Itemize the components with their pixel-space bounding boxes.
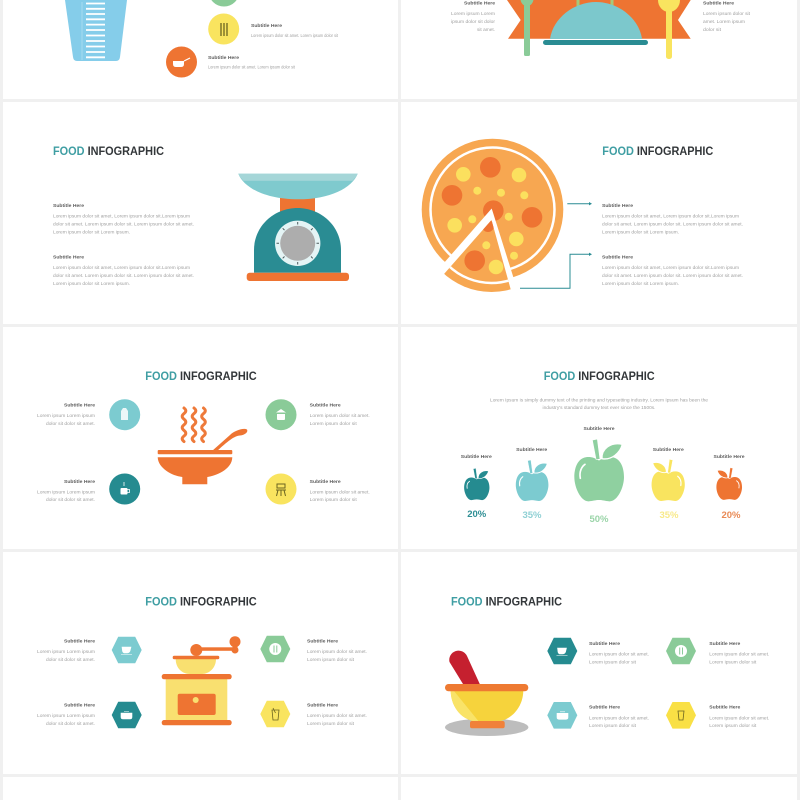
text block: cutlery subtitle: Subtitle Here xyxy=(251,23,282,28)
text block: pot: Lorem ipsum dolor sit xyxy=(310,421,358,426)
text block: plate: Lorem ipsum dolor sit amet. xyxy=(307,649,367,654)
panel: soup bowl slide xyxy=(3,327,398,549)
text block: grill: Lorem ipsum dolor sit xyxy=(310,497,358,502)
text block: pizza second: dolor sit amet. Lorem ipsum dolor sit. Lorem ipsum dolor sit amet. xyxy=(602,273,743,278)
icon: coffee grinder xyxy=(162,636,240,725)
text block: intro xyxy=(490,398,709,410)
text block: plate: Lorem ipsum dolor sit amet. xyxy=(709,651,769,656)
text block: pizza first: Lorem ipsum dolor sit amet, Lorem ipsum dolor sit.Lorem ipsum xyxy=(602,214,739,219)
chart item: 50% green apple: Subtitle Here xyxy=(584,426,615,431)
text block: plate: Subtitle Here xyxy=(709,641,741,646)
text block: cup: dolor sit dolor sit amet. xyxy=(46,657,95,662)
icon: yellow spoon xyxy=(658,0,680,59)
text block: pot xyxy=(589,705,649,728)
text block: intro: industry's standard dummy text ever since the 1500s. xyxy=(542,405,656,410)
text block: plate: Subtitle Here xyxy=(307,639,338,644)
text block: cup: Lorem ipsum dolor sit amet. xyxy=(589,651,649,656)
text block: pot: Lorem ipsum dolor sit amet. xyxy=(589,715,649,720)
icon: kitchen scale xyxy=(238,174,358,281)
title: FOOD INFOGRAPHIC xyxy=(53,144,164,158)
text block: scale first: Lorem ipsum dolor sit Lorem ipsum. xyxy=(53,230,130,235)
text block: pizza second: Lorem ipsum dolor sit amet, Lorem ipsum dolor sit.Lorem ipsum xyxy=(602,265,739,270)
arrow: to second text xyxy=(520,253,592,288)
icon: yellow cutlery circle xyxy=(208,14,239,44)
panel: pizza slide xyxy=(401,102,797,324)
panel: kitchen scale slide xyxy=(3,102,398,324)
text block: bottle: dolor sit dolor sit amet. xyxy=(46,421,95,426)
chart item: 35% light teal apple: Subtitle Here xyxy=(516,447,548,452)
text block: coffee xyxy=(37,479,95,502)
text block: scale second: dolor sit amet. Lorem ipsum dolor sit. Lorem ipsum dolor sit amet. xyxy=(53,273,194,278)
text block: plate: Lorem ipsum dolor sit xyxy=(709,659,757,664)
text block: pizza first: Lorem ipsum dolor sit Lorem ipsum. xyxy=(602,230,679,235)
text block: cloche left: Lorem ipsum Lorem xyxy=(451,11,495,16)
text block: cloche right xyxy=(703,0,751,32)
panel: mortar slide xyxy=(401,552,797,774)
title: FOOD INFOGRAPHIC xyxy=(602,144,713,158)
icon: green circle xyxy=(208,0,240,6)
text block: pot: Subtitle Here xyxy=(310,403,341,408)
text block: drink: Lorem ipsum dolor sit xyxy=(307,721,355,726)
icon: drink hexagon xyxy=(260,701,290,727)
text block: scale first xyxy=(53,203,194,235)
text block: grill xyxy=(310,479,370,502)
text block: pot: Subtitle Here xyxy=(64,703,95,708)
text block: scale first: Subtitle Here xyxy=(53,203,84,208)
text block: drink xyxy=(307,703,367,726)
text block: cup xyxy=(37,639,95,662)
panel: coffee grinder slide xyxy=(3,552,398,774)
text block: cup: Subtitle Here xyxy=(64,639,95,644)
icon: measuring cup xyxy=(65,0,127,61)
text block: pot: dolor sit dolor sit amet. xyxy=(46,721,95,726)
text block: pot: Subtitle Here xyxy=(589,705,620,710)
text block: cloche right: Lorem ipsum dolor sit xyxy=(703,11,751,16)
text block: coffee: dolor sit dolor sit amet. xyxy=(46,497,95,502)
panel: empty bottom right xyxy=(401,777,797,800)
text block: cup: Subtitle Here xyxy=(589,641,620,646)
text block: cloche right: dolor sit xyxy=(703,27,722,32)
chart item: 35% yellow apple xyxy=(652,447,685,521)
text block: bottle xyxy=(37,403,95,426)
title: FOOD INFOGRAPHIC xyxy=(145,594,257,608)
chart item: 35% yellow apple: Subtitle Here xyxy=(653,447,684,452)
text block: pizza first xyxy=(602,203,743,235)
text block: scale second: Subtitle Here xyxy=(53,255,84,260)
text block: scale second: Lorem ipsum dolor sit amet, Lorem ipsum dolor sit.Lorem ipsum xyxy=(53,265,190,270)
text block: coffee: Lorem ipsum Lorem ipsum xyxy=(37,489,95,494)
text block: pizza second xyxy=(602,255,743,286)
icon: grill circle xyxy=(266,474,296,504)
text block: pan subtitle: Subtitle Here xyxy=(208,55,239,60)
chart item: 50% green apple: 50% xyxy=(589,514,609,525)
icon: orange ribbon xyxy=(507,0,691,39)
text block: cloche left: Subtitle Here xyxy=(464,0,495,5)
text block: grill: Lorem ipsum dolor sit amet. xyxy=(310,489,370,494)
text block: drink: Subtitle Here xyxy=(307,703,338,708)
icon: mortar and pestle xyxy=(445,651,528,736)
text block: intro: Lorem Ipsum is simply dummy text of the printing and typesetting industry. Lorem Ipsum has been the xyxy=(490,398,709,402)
text block: pot xyxy=(37,703,95,726)
icon: plate hexagon xyxy=(666,638,696,664)
panel: apple chart slide xyxy=(401,327,797,549)
panel: empty bottom left xyxy=(3,777,398,800)
icon: plate hexagon xyxy=(260,636,290,662)
icon: cup hexagon xyxy=(547,638,577,664)
icon: pot hexagon xyxy=(112,702,142,728)
title: FOOD INFOGRAPHIC xyxy=(145,369,257,383)
text block: pan subtitle xyxy=(208,55,296,70)
text block: pot: Lorem ipsum dolor sit xyxy=(589,723,637,728)
icon: soup bowl xyxy=(158,408,247,484)
text block: plate: Lorem ipsum dolor sit xyxy=(307,657,355,662)
text block: cutlery subtitle xyxy=(251,23,339,38)
icon: cup hexagon xyxy=(112,637,142,663)
text block: pot: Lorem ipsum Lorem ipsum xyxy=(37,713,95,718)
icon: bottle circle xyxy=(109,399,140,430)
chart item: 35% light teal apple xyxy=(516,447,548,521)
chart item: 20% teal apple: Subtitle Here xyxy=(461,454,492,459)
text block: coffee: Subtitle Here xyxy=(64,479,95,484)
text block: pot: Lorem ipsum dolor sit amet. xyxy=(310,413,370,418)
text block: cup: Lorem ipsum dolor sit xyxy=(589,659,637,664)
text block: pot xyxy=(310,403,370,426)
icon: cloche xyxy=(543,0,648,45)
chart item: 20% orange apple: Subtitle Here xyxy=(714,454,745,459)
chart item: 20% orange apple: 20% xyxy=(721,510,741,521)
chart item: 20% teal apple xyxy=(461,454,492,520)
text block: plate xyxy=(709,641,769,664)
text block: cloche left: ipsum dolor sit dolor xyxy=(451,19,496,24)
chart item: 20% teal apple: 20% xyxy=(467,509,487,520)
text block: pizza second: Lorem ipsum dolor sit Lorem ipsum. xyxy=(602,281,679,286)
text block: drink: Lorem ipsum dolor sit amet. xyxy=(307,713,367,718)
text block: scale first: Lorem ipsum dolor sit amet, Lorem ipsum dolor sit.Lorem ipsum xyxy=(53,214,190,219)
text block: cloche right: amet. Lorem ipsum xyxy=(703,19,745,24)
icon: coffee circle xyxy=(109,474,140,504)
panel: cloche slide xyxy=(401,0,797,99)
text block: cloche right: Subtitle Here xyxy=(703,0,734,5)
icon: orange pan circle xyxy=(166,46,197,78)
text block: cloche left xyxy=(451,0,496,32)
text block: pizza first: Subtitle Here xyxy=(602,203,633,208)
text block: cup xyxy=(589,641,649,664)
title: FOOD INFOGRAPHIC xyxy=(544,369,655,383)
chart item: 35% yellow apple: 35% xyxy=(659,510,679,521)
text block: plate xyxy=(307,639,367,662)
text block: grill: Subtitle Here xyxy=(310,479,341,484)
chart item: 50% green apple xyxy=(574,426,624,525)
text block: pizza second: Subtitle Here xyxy=(602,255,633,260)
text block: cutlery subtitle: Lorem ipsum dolor sit amet. Lorem ipsum dolor sit xyxy=(251,33,339,38)
text block: drink: Subtitle Here xyxy=(709,705,741,710)
text block: bottle: Lorem ipsum Lorem ipsum xyxy=(37,413,95,418)
text block: cup: Lorem ipsum Lorem ipsum xyxy=(37,649,95,654)
icon: pot hexagon xyxy=(547,702,577,729)
text block: scale second xyxy=(53,255,194,286)
text block: bottle: Subtitle Here xyxy=(64,403,95,408)
icon: pot circle xyxy=(266,399,296,430)
title: FOOD INFOGRAPHIC xyxy=(451,594,562,608)
icon: pizza xyxy=(420,139,563,305)
arrow: to first text xyxy=(567,202,592,205)
icon: drink hexagon xyxy=(666,702,696,729)
chart item: 35% light teal apple: 35% xyxy=(522,510,542,521)
text block: pizza first: dolor sit amet. Lorem ipsum dolor sit. Lorem ipsum dolor sit amet. xyxy=(602,222,743,227)
text block: drink xyxy=(709,705,769,728)
panel: measuring cup slide xyxy=(3,0,398,99)
text block: drink: Lorem ipsum dolor sit xyxy=(709,723,757,728)
text block: cloche left: sit amet. xyxy=(477,27,495,32)
chart item: 20% orange apple xyxy=(714,454,745,521)
icon: green spoon xyxy=(520,0,534,56)
text block: scale first: dolor sit amet. Lorem ipsum dolor sit. Lorem ipsum dolor sit amet. xyxy=(53,222,194,227)
text block: pan subtitle: Lorem ipsum dolor sit amet. Lorem ipsum dolor sit xyxy=(208,64,296,70)
text block: drink: Lorem ipsum dolor sit amet. xyxy=(709,715,769,720)
text block: scale second: Lorem ipsum dolor sit Lorem ipsum. xyxy=(53,281,130,286)
